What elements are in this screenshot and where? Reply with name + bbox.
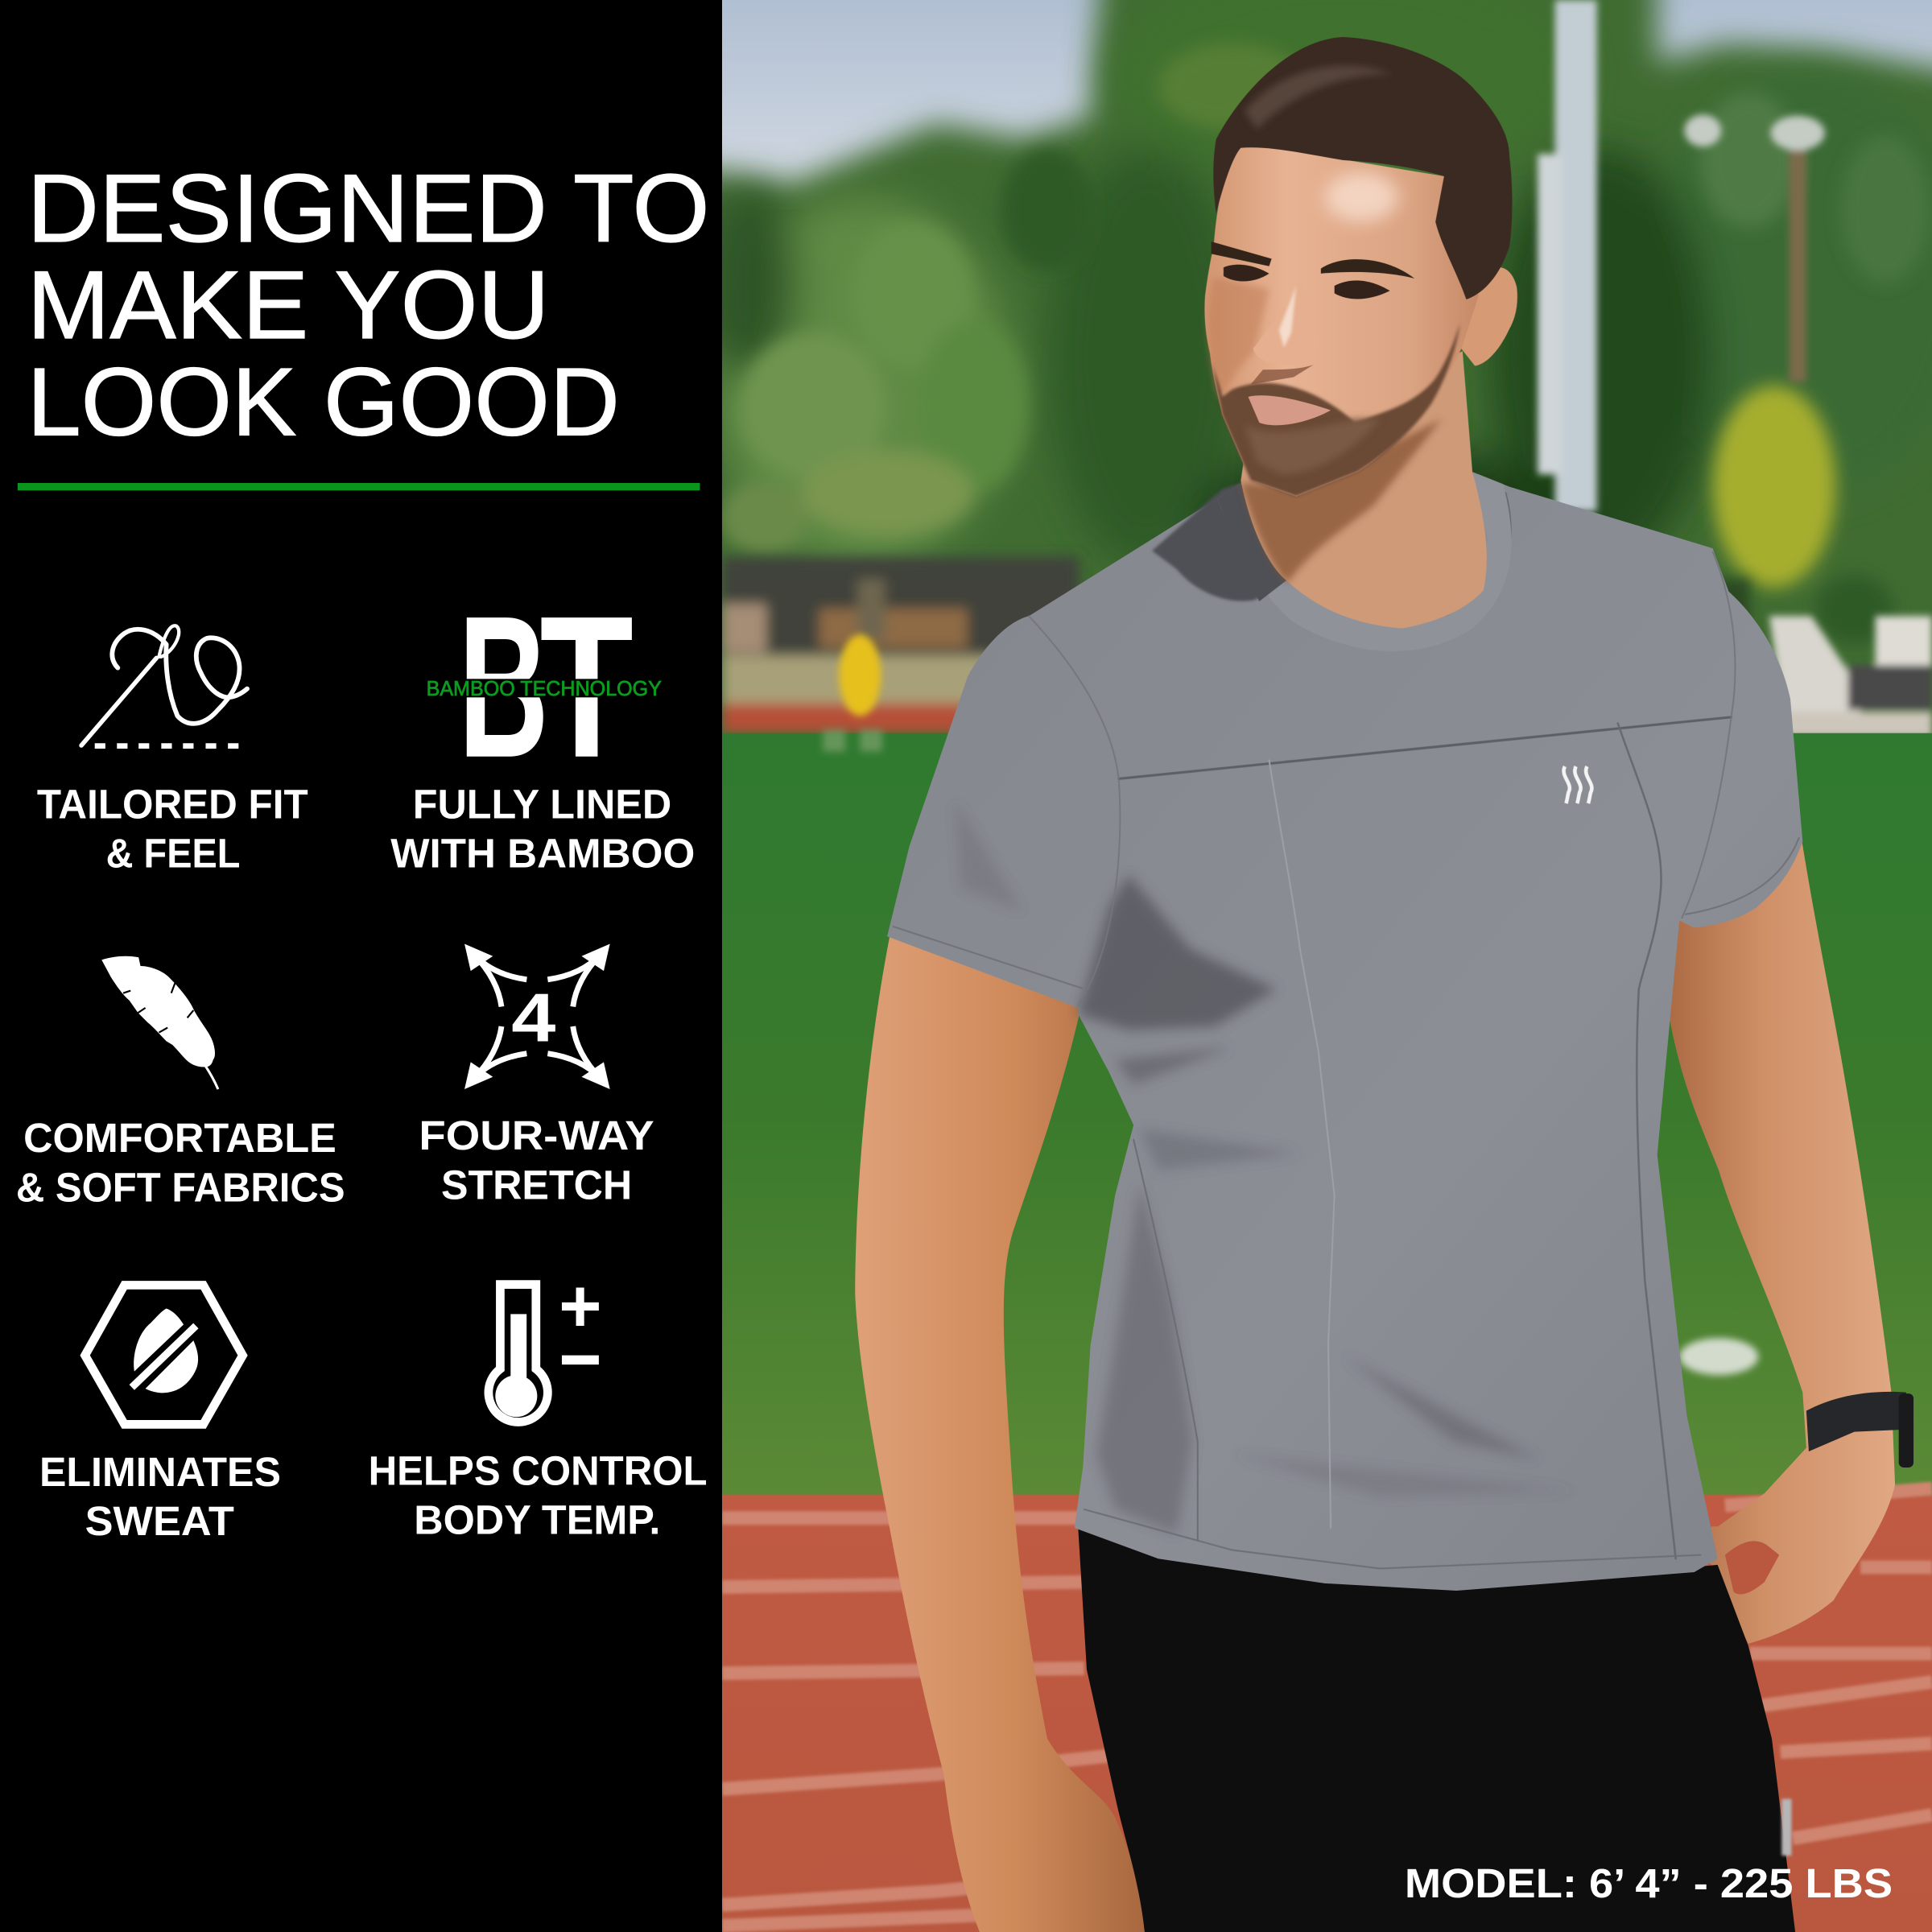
label: tailored fit: TAILORED FIT: [37, 781, 308, 827]
feature: fully lined: [390, 574, 695, 877]
label: fully lined: FULLY LINED: [413, 781, 671, 827]
head: eyes: [1224, 265, 1390, 299]
label: tailored fit: & FEEL: [106, 831, 240, 877]
feature: comfortable: [16, 956, 345, 1210]
icon: four-way arrows: 4: [511, 979, 556, 1056]
label: eliminates sweat: [39, 1449, 281, 1544]
label: body temperature: [369, 1447, 708, 1543]
head: nose highlight: [1279, 286, 1296, 348]
track lane lines: [722, 1488, 1932, 1926]
label: eliminates sweat: SWEAT: [85, 1498, 234, 1544]
model: left arm: [855, 924, 1145, 1932]
neck shadow: [1241, 419, 1442, 583]
feature: body temperature: [369, 1285, 708, 1543]
label: four-way stretch: [419, 1113, 654, 1208]
background: light pole and lamp post: [1538, 0, 1825, 511]
hair: lighter strands: [1245, 66, 1393, 130]
label: tailored fit: [37, 781, 308, 877]
head: ear: [1461, 267, 1517, 366]
head: chin stubble: [1245, 419, 1380, 474]
title: [27, 155, 710, 456]
title: DESIGNED TO: [27, 155, 710, 262]
model: black watch: [1806, 1392, 1913, 1468]
background: white bleachers: [1769, 616, 1932, 737]
head: hair: [1213, 37, 1512, 299]
label: comfortable: & SOFT FABRICS: [16, 1164, 345, 1210]
collar shaded left part: [1217, 483, 1286, 601]
head: beard: [1210, 323, 1460, 497]
model: grey t-shirt: [887, 472, 1802, 1591]
feature: eliminates sweat: [39, 1285, 281, 1544]
label: four-way stretch: FOUR-WAY: [419, 1113, 654, 1158]
icon: feather: [101, 956, 218, 1089]
icon: BT bamboo technology logo: B: [458, 575, 549, 800]
icon: BT bamboo technology logo: [425, 574, 663, 800]
green divider: [18, 483, 700, 490]
label: comfortable: [16, 1115, 345, 1210]
head: lips: [1249, 395, 1331, 425]
model: black shorts: [1078, 1528, 1795, 1932]
title: LOOK GOOD: [27, 349, 620, 456]
feature: four-way stretch: [419, 943, 654, 1208]
background: grass field: [722, 733, 1932, 1503]
label: four-way stretch: STRETCH: [441, 1162, 632, 1208]
model: head: [1204, 37, 1517, 497]
icon: hexagon with crossed drop: [85, 1285, 243, 1424]
background: white marker on grass: [1679, 1338, 1758, 1375]
icon: BT bamboo technology logo: BAMBOO TECHNOLOGY: [427, 676, 662, 700]
t-shirt: fold shadows: [955, 801, 1577, 1534]
head: nose shadow: [1251, 365, 1314, 385]
head: face: [1204, 142, 1479, 497]
icon: needle and thread: [81, 625, 247, 749]
label: body temperature: BODY TEMP.: [414, 1497, 660, 1543]
title: MAKE YOU: [27, 252, 550, 359]
head: nose: [1253, 279, 1318, 366]
head: highlight on forehead: [1324, 172, 1398, 222]
model: hand shading: [1725, 1541, 1779, 1595]
t-shirt: seams: [894, 493, 1799, 1568]
panel: black sidebar: [0, 0, 722, 1932]
background: blurred trees: [690, 0, 1932, 764]
head: left cheek shade: [1208, 277, 1269, 400]
label: comfortable: COMFORTABLE: [23, 1115, 336, 1161]
model caption: MODEL: 6’ 4” - 225 LBS: [1405, 1860, 1893, 1906]
background: yellow figure: [823, 634, 882, 752]
icon: BT bamboo technology logo: T: [539, 574, 634, 800]
t-shirt: shadow cast by head: [1152, 483, 1287, 601]
background: far side of field: [722, 557, 1749, 739]
background: sky: [722, 0, 1932, 209]
label: fully lined: [390, 781, 695, 877]
model: right arm and hand: [1657, 838, 1895, 1644]
head: eyebrows: [1212, 242, 1414, 279]
label: eliminates sweat: ELIMINATES: [39, 1449, 281, 1495]
model: neck: [1241, 351, 1487, 629]
icon: four-way arrows: [464, 943, 610, 1089]
feature: tailored fit: [37, 625, 308, 877]
t-shirt: collar band: [1217, 472, 1512, 651]
background: red running track: [722, 1495, 1932, 1932]
label: body temperature: HELPS CONTROL: [369, 1447, 708, 1493]
photo: athlete on running track: [690, 0, 1932, 1932]
t-shirt: white wave logo: [1564, 766, 1591, 803]
icon: thermometer with plus and minus: [489, 1285, 599, 1422]
label: fully lined: WITH BAMBOO: [390, 831, 695, 877]
